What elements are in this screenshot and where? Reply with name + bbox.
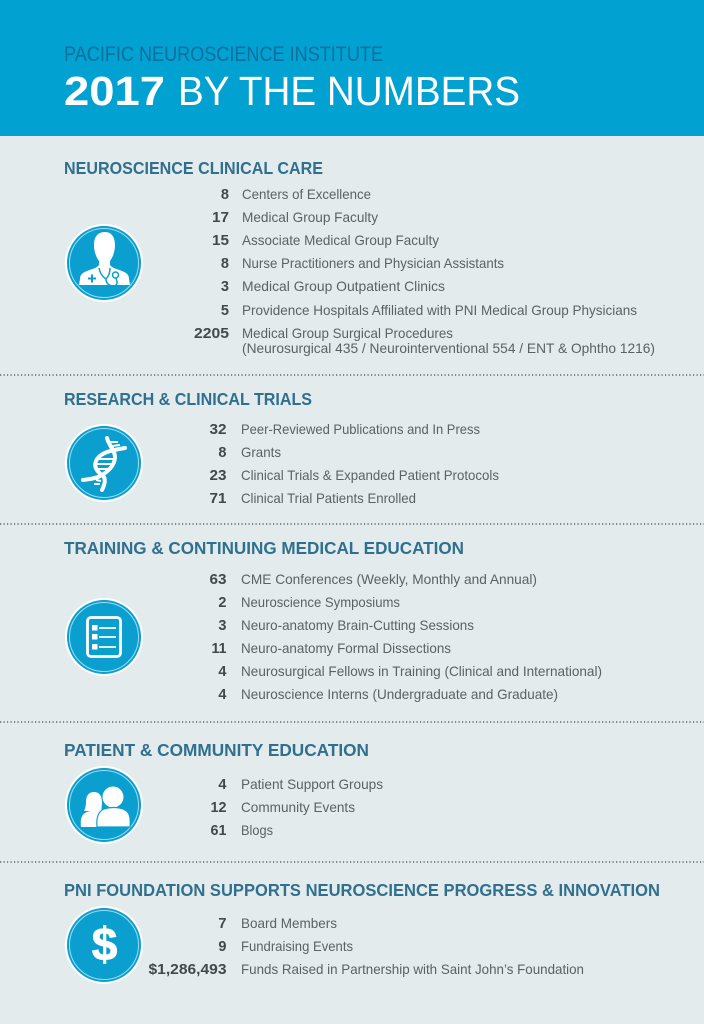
stat list: Board Members: [241, 915, 337, 931]
stat list: Funds Raised in Partnership with Saint John’s Foundation: [241, 961, 584, 977]
stat list: 2: [218, 595, 226, 611]
header banner: [0, 0, 704, 136]
stat list: 23: [210, 468, 226, 484]
stat list: 4: [218, 687, 226, 703]
header subtitle: PACIFIC NEUROSCIENCE INSTITUTE: [64, 43, 383, 66]
stat list: 12: [210, 800, 226, 816]
icon: dollar sign: [65, 906, 143, 984]
stat list: (Neurosurgical 435 / Neurointerventional 554 / ENT & Ophtho 1216): [242, 340, 655, 356]
stat list: Fundraising Events: [241, 938, 353, 954]
stat list: 15: [212, 233, 229, 249]
stat list: CME Conferences (Weekly, Monthly and Annual): [241, 571, 537, 587]
panel: research and clinical trials: [64, 389, 499, 507]
stat list: 17: [212, 210, 229, 226]
stat list: Grants: [241, 444, 281, 460]
heading: TRAINING & CONTINUING MEDICAL EDUCATION: [64, 538, 464, 558]
stat list: Nurse Practitioners and Physician Assistants: [242, 255, 504, 271]
stat list: 8: [218, 445, 226, 461]
heading: PATIENT & COMMUNITY EDUCATION: [64, 740, 369, 760]
stat list: 71: [210, 491, 226, 507]
main title: 2017: [64, 68, 165, 114]
stat list: Neuroscience Interns (Undergraduate and Graduate): [241, 686, 558, 702]
stat list: Clinical Trials & Expanded Patient Protocols: [241, 467, 499, 483]
stat list: 8: [221, 256, 229, 272]
stat list: Medical Group Faculty: [242, 209, 378, 225]
stat list: Clinical Trial Patients Enrolled: [241, 490, 416, 506]
stat list: Patient Support Groups: [241, 776, 383, 792]
stat list: 32: [210, 422, 226, 438]
stat list: 8: [221, 187, 229, 203]
main title: BY THE NUMBERS: [178, 68, 520, 114]
stat list: [210, 421, 499, 507]
stat list: 11: [212, 641, 226, 657]
stat list: 3: [218, 618, 226, 634]
stat list: Medical Group Outpatient Clinics: [242, 278, 445, 294]
stat list: Neuro-anatomy Brain-Cutting Sessions: [241, 617, 474, 633]
stat list: 4: [218, 777, 226, 793]
stat list: Peer-Reviewed Publications and In Press: [241, 421, 480, 437]
heading: RESEARCH & CLINICAL TRIALS: [64, 389, 312, 409]
stat list: 9: [218, 939, 226, 955]
panel: neuroscience clinical care: [64, 158, 655, 356]
panel: training and continuing medical education: [64, 538, 602, 703]
stat list: 5: [221, 303, 229, 319]
panel: patient and community education: [64, 740, 383, 844]
icon: checklist document: [65, 598, 143, 676]
stat list: Centers of Excellence: [242, 186, 371, 202]
stat list: $1,286,493: [148, 962, 226, 978]
stat list: 7: [218, 916, 226, 932]
stat list: Neurosurgical Fellows in Training (Clinical and International): [241, 663, 602, 679]
stat list: Community Events: [241, 799, 355, 815]
stat list: [210, 776, 383, 839]
icon: doctor with stethoscope: [65, 224, 143, 302]
stat list: Associate Medical Group Faculty: [242, 232, 439, 248]
stat list: [210, 571, 602, 703]
stat list: Medical Group Surgical Procedures: [242, 325, 453, 341]
stat list: 4: [218, 664, 226, 680]
stat list: Neuroscience Symposiums: [241, 594, 400, 610]
heading: PNI FOUNDATION SUPPORTS NEUROSCIENCE PROGRESS & INNOVATION: [64, 880, 660, 900]
stat list: 61: [210, 823, 226, 839]
stat list: [148, 915, 584, 978]
icon: DNA helix: [65, 424, 143, 502]
panel: PNI foundation: [64, 880, 660, 984]
icon: dollar sign: $: [92, 918, 117, 970]
stat list: 2205: [194, 326, 229, 342]
icon: two people: [65, 766, 143, 844]
stat list: 63: [210, 572, 226, 588]
stat list: 3: [221, 279, 229, 295]
stat list: Providence Hospitals Affiliated with PNI Medical Group Physicians: [242, 302, 637, 318]
stat list: Blogs: [241, 822, 273, 838]
heading: NEUROSCIENCE CLINICAL CARE: [64, 158, 323, 178]
stat list: Neuro-anatomy Formal Dissections: [241, 640, 451, 656]
stat list: [194, 186, 655, 356]
